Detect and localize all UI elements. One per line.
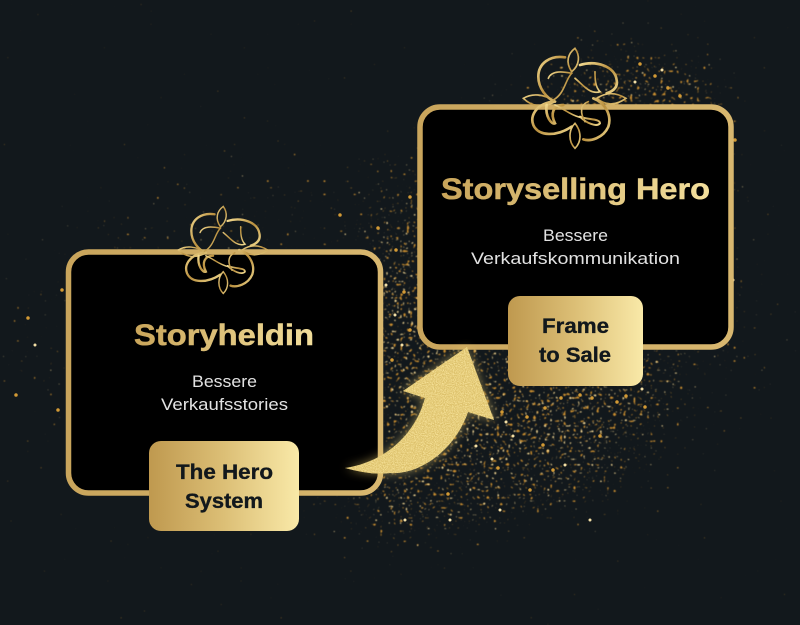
panel frame [420, 107, 731, 347]
tag: The Hero System [149, 441, 299, 531]
body text [161, 372, 288, 414]
body text: Bessere [543, 226, 608, 245]
heading: Storyheldin [134, 319, 314, 352]
body text: Verkaufskommunikation [471, 249, 680, 268]
tag: Frame to Sale: Frame [542, 315, 609, 338]
body text [471, 226, 680, 268]
panel frame [68, 252, 380, 493]
panel: Storyheldin [68, 206, 380, 531]
body text: Bessere [192, 372, 257, 391]
icon: ornament knot [178, 206, 268, 293]
heading: Storyselling Hero [441, 173, 710, 206]
icon: ornament knot [523, 48, 626, 148]
arrow: glitter arrow between panels [345, 347, 494, 474]
tag: The Hero System: The Hero [176, 461, 273, 484]
tag: Frame to Sale: to Sale [539, 344, 611, 367]
body text: Verkaufsstories [161, 395, 288, 414]
panel: Storyselling Hero [420, 48, 731, 386]
tag: The Hero System: System [185, 490, 263, 513]
tag: Frame to Sale [508, 296, 643, 386]
gold dust: larger sparkles [16, 64, 735, 520]
